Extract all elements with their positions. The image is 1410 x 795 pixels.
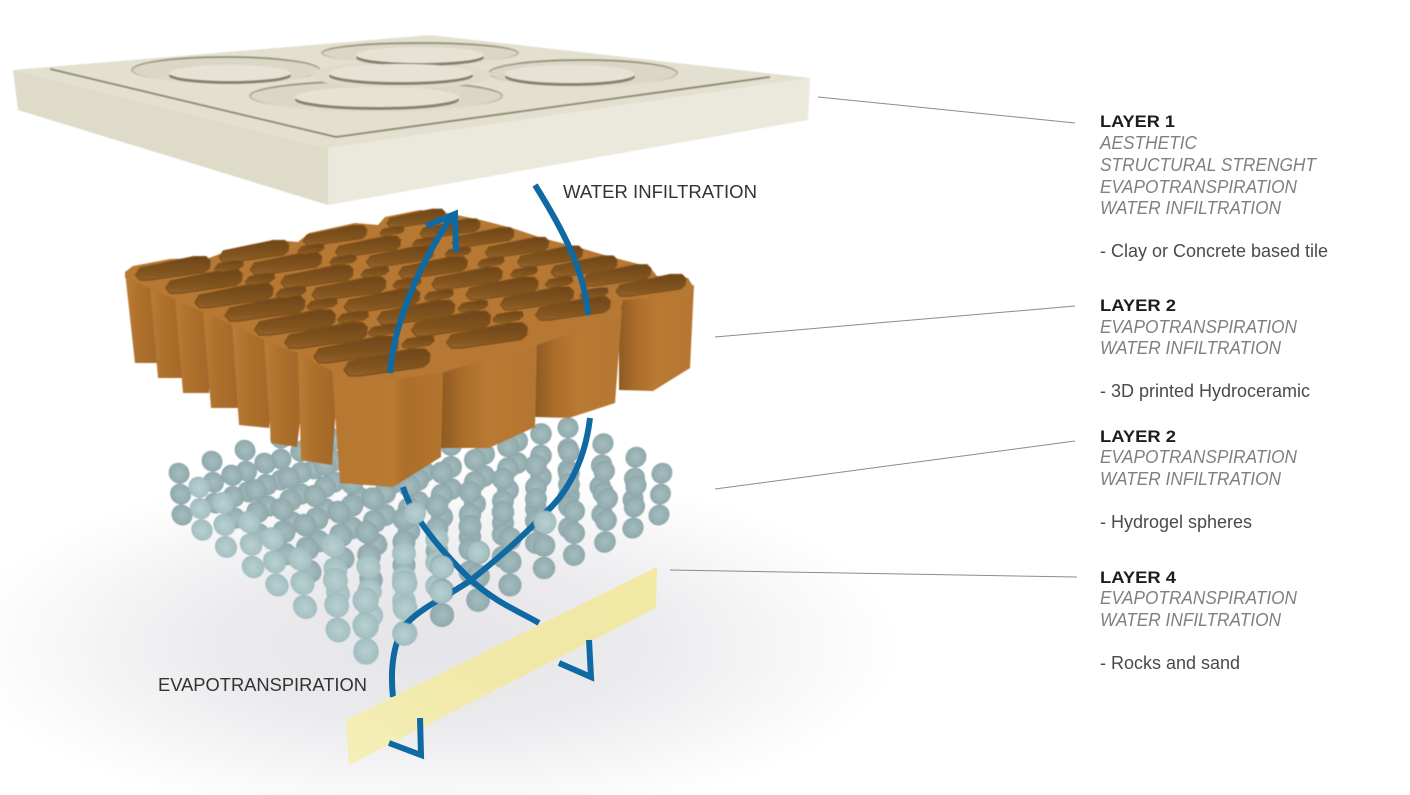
text block: layer 2 hydroceramic: - 3D printed Hydroceramic bbox=[1100, 381, 1310, 401]
label: evapotranspiration: EVAPOTRANSPIRATION bbox=[158, 674, 367, 695]
leader line: layer 4 bbox=[670, 570, 1077, 577]
arrowhead: lower right bbox=[559, 640, 591, 677]
layer 2: hydroceramic honeycomb bbox=[125, 209, 694, 487]
text block: layer 2 hydrogel: EVAPOTRANSPIRATION bbox=[1100, 446, 1298, 467]
text block: layer 1 bbox=[1099, 112, 1328, 261]
lower blue flow curves bbox=[392, 418, 590, 697]
text block: layer 2 hydrogel bbox=[1100, 427, 1298, 532]
arrow: rising flow with arrowhead bbox=[390, 214, 456, 373]
arrowhead: lower left bbox=[389, 718, 421, 755]
arrow: water infiltration curve top bbox=[535, 185, 588, 315]
text block: layer 2 hydrogel: WATER INFILTRATION bbox=[1100, 468, 1282, 489]
text block: layer 2 hydroceramic: EVAPOTRANSPIRATION bbox=[1100, 316, 1298, 337]
ground shadow bbox=[0, 440, 940, 795]
text block: layer 1: LAYER 1 bbox=[1100, 112, 1175, 131]
text block: layer 1: WATER INFILTRATION bbox=[1100, 197, 1282, 218]
leader line: layer 2 hydroceramic bbox=[715, 306, 1075, 337]
text block: layer 2 hydroceramic bbox=[1100, 296, 1310, 401]
layer 4: rocks and sand strip bbox=[346, 567, 657, 765]
text block: layer 4: WATER INFILTRATION bbox=[1100, 609, 1282, 630]
text block: layer 2 hydrogel: - Hydrogel spheres bbox=[1100, 512, 1252, 532]
text block: layer 1: - Clay or Concrete based tile bbox=[1100, 241, 1328, 261]
leader line: layer 1 bbox=[818, 97, 1075, 123]
text block: layer 4: EVAPOTRANSPIRATION bbox=[1100, 587, 1298, 608]
leader line: layer 2 hydrogel bbox=[715, 441, 1075, 489]
text block: layer 4: - Rocks and sand bbox=[1100, 653, 1240, 673]
text block: layer 1: STRUCTURAL STRENGHT bbox=[1100, 154, 1318, 175]
layer 3: hydrogel spheres bbox=[168, 408, 673, 665]
text block: layer 1: AESTHETIC bbox=[1099, 132, 1198, 153]
text block: layer 2 hydroceramic: LAYER 2 bbox=[1100, 296, 1176, 315]
spheres in front of the flow curves bbox=[352, 502, 556, 662]
text block: layer 1: EVAPOTRANSPIRATION bbox=[1100, 176, 1298, 197]
text block: layer 2 hydroceramic: WATER INFILTRATION bbox=[1100, 337, 1282, 358]
text block: layer 2 hydrogel: LAYER 2 bbox=[1100, 427, 1176, 446]
text block: layer 4 bbox=[1100, 568, 1298, 673]
layer 1: clay or concrete tile bbox=[13, 35, 810, 205]
text block: layer 4: LAYER 4 bbox=[1100, 568, 1177, 587]
label: water infiltration: WATER INFILTRATION bbox=[563, 181, 757, 202]
